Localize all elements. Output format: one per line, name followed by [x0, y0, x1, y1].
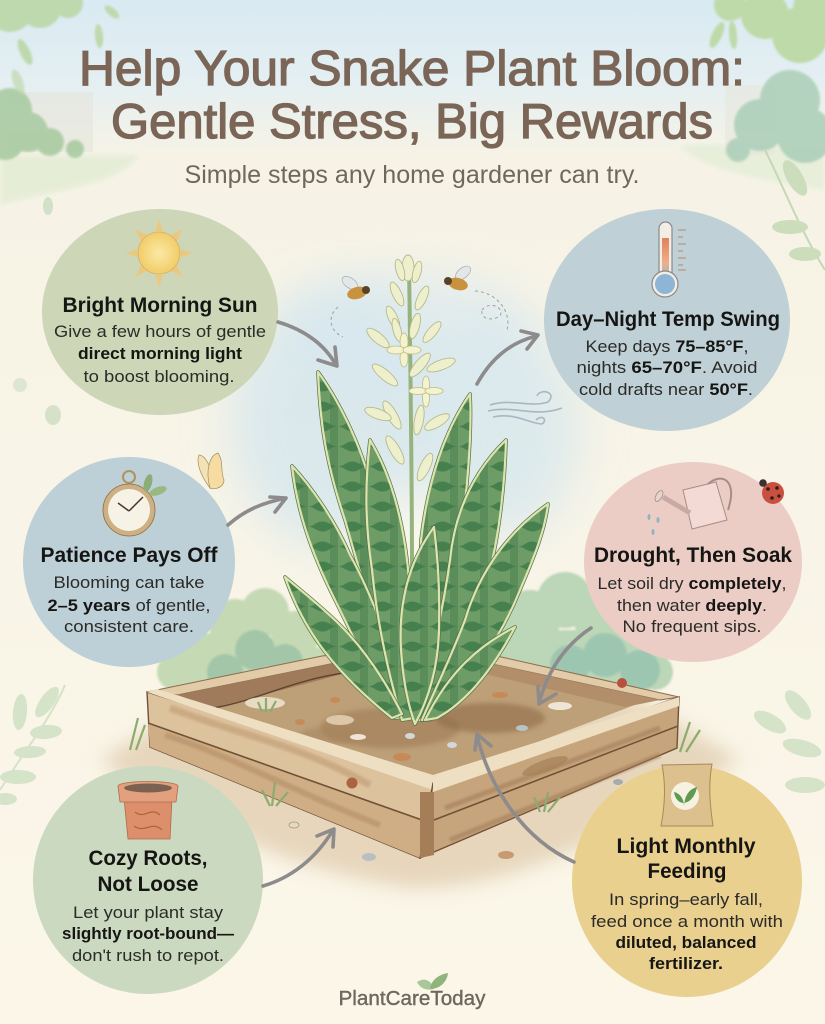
raised wooden garden bed — [130, 645, 700, 861]
scene: watercolor wash behind plant — [230, 270, 580, 630]
heading: Feeding — [648, 860, 726, 883]
soil — [190, 660, 640, 782]
heading: Patience Pays Off — [40, 544, 218, 567]
body text: cold drafts near 50°F. — [579, 380, 753, 399]
body text: feed once a month with — [591, 912, 783, 931]
panel: light monthly feeding — [572, 764, 802, 997]
panel: cozy roots — [33, 766, 263, 994]
corner post — [420, 792, 434, 858]
icon: fertilizer bag — [661, 764, 713, 826]
body text: diluted, balanced — [616, 933, 756, 952]
panel: day-night temp swing — [544, 209, 790, 431]
body text — [598, 574, 786, 636]
right front rail — [420, 697, 679, 858]
body text: nights 65–70°F . Avoid — [576, 358, 758, 377]
arrow: patience to plant — [228, 497, 286, 525]
heading: Day–Night Temp Swing — [556, 308, 780, 331]
body text: Give a few hours of gentle — [54, 322, 266, 341]
body text: In spring–early fall, — [609, 890, 763, 909]
body text — [591, 890, 783, 973]
body text: Blooming can take — [54, 573, 204, 592]
arrow: drought to soil — [538, 628, 591, 704]
panel: bright morning sun — [42, 209, 278, 415]
back rails — [147, 645, 679, 700]
ladybugs on bed — [346, 778, 358, 788]
body text: fertilizer. — [649, 954, 723, 973]
panel: drought then soak — [584, 462, 802, 662]
title: Help Your Snake Plant Bloom: — [79, 42, 745, 96]
body text: to boost blooming. — [84, 367, 234, 386]
heading — [616, 835, 756, 883]
heading: Cozy Roots, — [88, 847, 208, 870]
body text: consistent care. — [64, 617, 194, 636]
arrow: feeding to soil — [475, 734, 574, 862]
panel: patience pays off — [23, 457, 235, 667]
tufts of grass — [130, 698, 700, 812]
body text: Let your plant stay — [73, 903, 224, 922]
snake plant — [285, 255, 548, 724]
body text: Keep days 75–85°F, — [586, 337, 748, 356]
leaves — [285, 372, 548, 724]
body text — [576, 337, 758, 399]
title: Gentle Stress, Big Rewards — [111, 95, 713, 149]
heading: Light Monthly — [616, 835, 756, 858]
heading: Not Loose — [98, 873, 198, 896]
subtitle: Simple steps any home gardener can try. — [184, 161, 640, 189]
body text — [48, 573, 210, 636]
scene: ground wash — [100, 700, 740, 888]
arrow: roots to bed — [263, 829, 334, 886]
icon: pocket watch — [103, 471, 168, 536]
soil patches — [320, 708, 460, 748]
body text: slightly root-bound— — [62, 924, 234, 943]
icon: thermometer — [652, 222, 686, 297]
heading: Drought, Then Soak — [594, 544, 792, 567]
heading: Bright Morning Sun — [62, 294, 258, 317]
body text: Let soil dry completely, — [598, 574, 786, 593]
stones around bed — [362, 853, 376, 861]
body text — [54, 322, 266, 386]
icon: sun — [125, 219, 193, 287]
title — [79, 42, 745, 149]
icon: wind lines — [488, 392, 562, 424]
brand logo — [338, 973, 486, 1010]
icon: bee left — [331, 274, 370, 337]
body text: 2–5 years of gentle, — [48, 596, 210, 615]
scene: background bushes — [157, 572, 673, 690]
icon: watering can — [648, 479, 731, 535]
icon: ladybug — [759, 479, 784, 504]
body text: don't rush to repot. — [72, 946, 224, 965]
flower spike — [363, 255, 457, 690]
arrow: sun to plant — [278, 322, 337, 366]
left front rail — [147, 692, 433, 858]
scene: side foliage — [0, 683, 825, 805]
body text — [62, 903, 234, 965]
heading — [88, 847, 208, 896]
body text: No frequent sips. — [622, 617, 762, 636]
arrow: plant to temperature — [477, 331, 538, 384]
icon: butterfly — [198, 453, 224, 489]
icon: bee right — [444, 263, 508, 330]
body text: direct morning light — [78, 344, 242, 363]
brand logo: PlantCareToday — [338, 988, 486, 1010]
icon: terracotta pot — [118, 782, 178, 839]
body text: then water deeply. — [617, 596, 767, 615]
scene: top garden, fence and corner foliage — [0, 0, 825, 425]
